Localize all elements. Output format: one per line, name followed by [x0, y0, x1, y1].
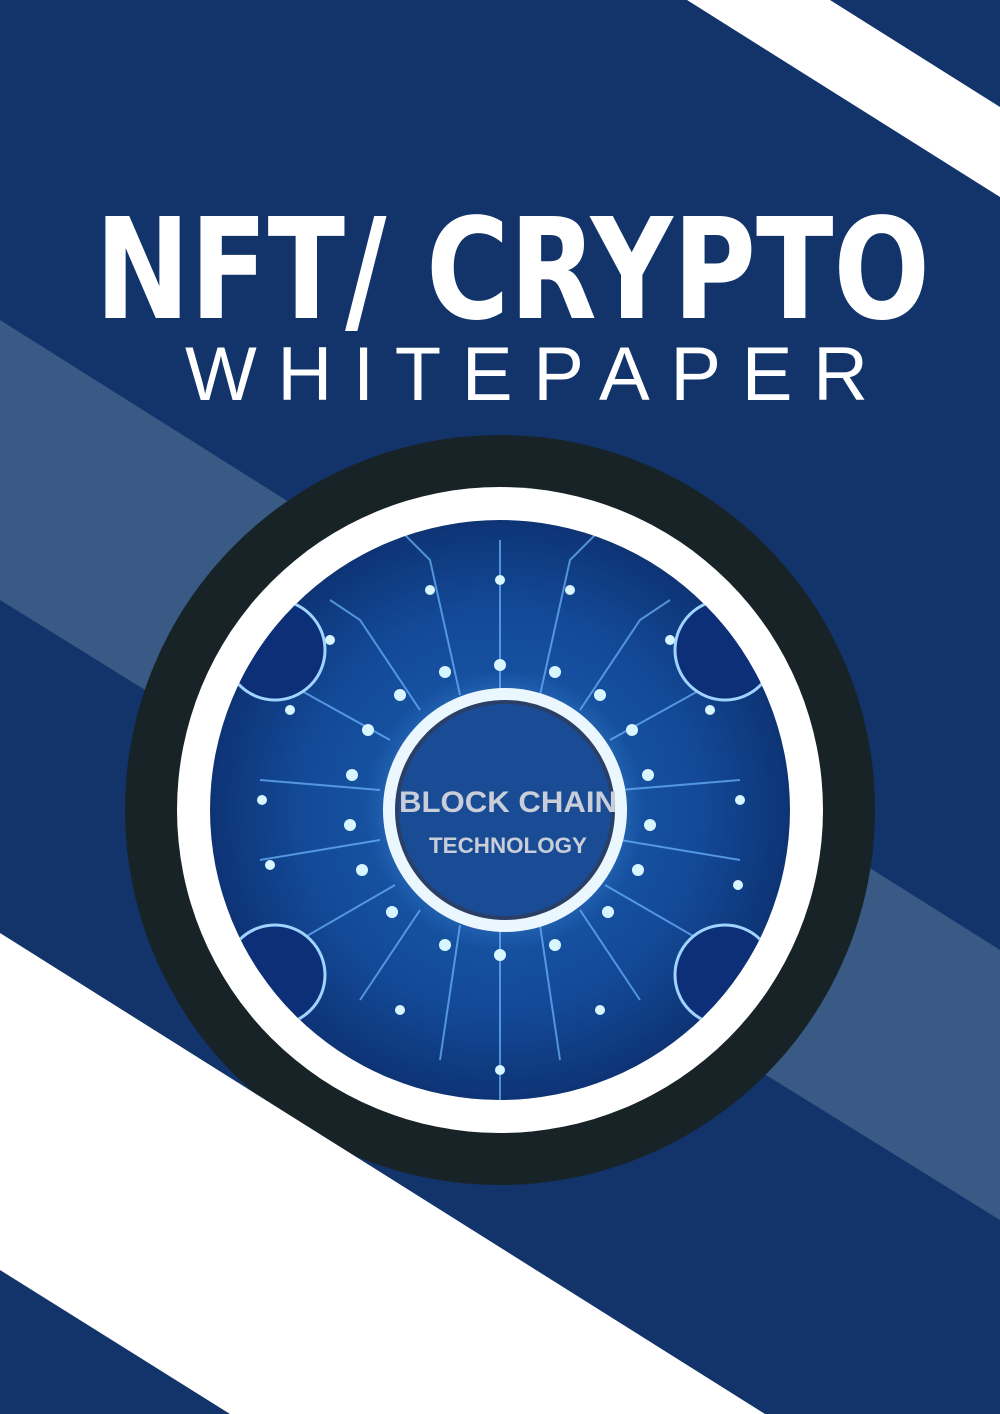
- dark ring: [125, 435, 875, 1185]
- circuit lines: [260, 530, 740, 1100]
- white ring: [177, 487, 823, 1133]
- blockchain image: [200, 510, 800, 1110]
- top-right white stripe: [687, 0, 1000, 197]
- bottom white stripe: [0, 933, 765, 1414]
- center emblem: [365, 670, 645, 950]
- subtitle: WHITEPAPER: [185, 332, 868, 417]
- glowing dots: [257, 575, 745, 1075]
- label: technology: TECHNOLOGY: [429, 833, 587, 858]
- icon bubbles: [238, 604, 326, 702]
- light diagonal band: [0, 320, 1000, 1220]
- label: block chain: BLOCK CHAIN: [399, 786, 617, 819]
